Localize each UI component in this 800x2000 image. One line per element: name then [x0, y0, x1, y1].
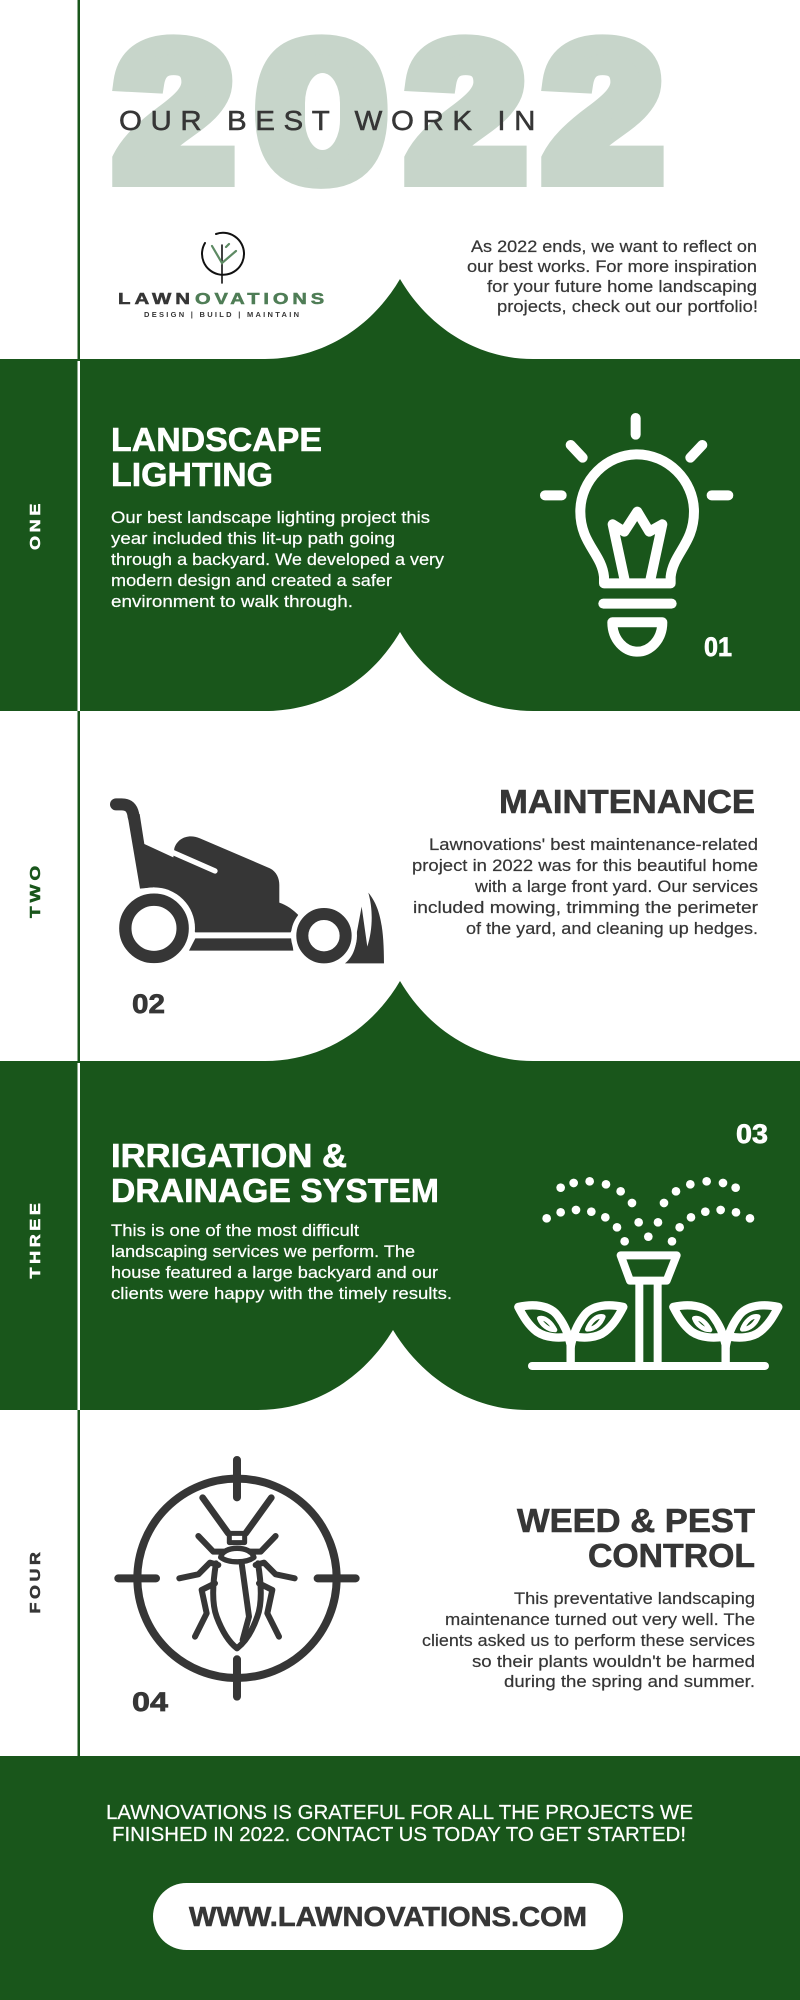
icon: light bulb	[545, 418, 728, 652]
body text: with a large front yard. Our services	[474, 878, 758, 896]
heading	[517, 1502, 755, 1574]
body text: year included this lit-up path going	[111, 530, 395, 548]
body text: Our best landscape lighting project this	[111, 509, 430, 527]
logo: Lawnovations	[118, 233, 328, 319]
vertical timeline line	[78, 0, 80, 359]
call to action text: FINISHED IN 2022. CONTACT US TODAY TO GET STARTED!	[112, 1824, 686, 1846]
body text	[111, 1222, 452, 1303]
body text: modern design and created a safer	[111, 572, 393, 590]
heading: LIGHTING	[111, 456, 273, 493]
intro text: projects, check out our portfolio!	[497, 298, 758, 316]
number 04: 04	[132, 1687, 168, 1717]
vertical timeline line	[78, 361, 80, 711]
body text	[111, 509, 445, 611]
big year 2022: 0	[258, 6, 385, 218]
band background with peak	[0, 1330, 800, 1756]
panel: weed and pest control	[0, 1330, 800, 1756]
number 01: 01	[704, 632, 732, 662]
body text	[422, 1590, 755, 1691]
number 02: 02	[132, 989, 165, 1019]
side label ONE: ONE	[27, 500, 44, 550]
body text: project in 2022 was for this beautiful home	[412, 857, 758, 875]
band background with peak	[0, 981, 800, 1410]
heading: MAINTENANCE	[499, 783, 755, 820]
icon: insect in target	[118, 1460, 356, 1697]
big year 2022: 2	[116, 6, 232, 218]
website pill	[153, 1883, 623, 1950]
intro text: our best works. For more inspiration	[467, 258, 757, 276]
body text: maintenance turned out very well. The	[445, 1611, 755, 1629]
body text: during the spring and summer.	[504, 1673, 755, 1691]
body text	[412, 836, 759, 938]
intro text: As 2022 ends, we want to reflect on	[471, 238, 757, 256]
footer background	[0, 1756, 800, 2000]
body text: This preventative landscaping	[514, 1590, 755, 1608]
panel: irrigation and drainage	[0, 981, 800, 1410]
logo tagline: DESIGN | BUILD | MAINTAIN	[144, 310, 299, 319]
panel: maintenance	[0, 632, 800, 1061]
number 03: 03	[736, 1119, 768, 1149]
big year 2022: 2	[545, 6, 661, 218]
side label FOUR: FOUR	[27, 1548, 44, 1614]
big year 2022	[116, 6, 661, 218]
body text: of the yard, and cleaning up hedges.	[466, 920, 758, 938]
intro text	[467, 238, 758, 316]
call to action text	[106, 1802, 693, 1846]
heading	[111, 1137, 439, 1209]
band background with peak	[0, 279, 800, 711]
body text: landscaping services we perform. The	[111, 1243, 415, 1261]
vertical timeline line	[78, 1410, 80, 1756]
vertical timeline line	[78, 1063, 80, 1410]
intro text: for your future home landscaping	[487, 278, 757, 296]
body text: included mowing, trimming the perimeter	[413, 899, 759, 917]
body text: house featured a large backyard and our	[111, 1264, 439, 1282]
heading: IRRIGATION &	[111, 1137, 347, 1174]
body text: so their plants wouldn't be harmed	[472, 1653, 755, 1671]
panel: footer	[0, 1756, 800, 2000]
vertical timeline line	[78, 711, 80, 1061]
band background with peak	[0, 632, 800, 1061]
logo wordmark: OVATIONS	[195, 291, 328, 308]
body text: through a backyard. We developed a very	[111, 551, 445, 569]
heading	[111, 421, 322, 493]
big year 2022: 2	[408, 6, 524, 218]
call to action text: LAWNOVATIONS IS GRATEFUL FOR ALL THE PROJECTS WE	[106, 1802, 693, 1824]
body text: This is one of the most difficult	[111, 1222, 359, 1240]
side label THREE: THREE	[27, 1200, 44, 1278]
side label TWO: TWO	[27, 862, 44, 918]
logo wordmark	[118, 291, 328, 308]
panel: landscape lighting	[0, 279, 800, 711]
heading: DRAINAGE SYSTEM	[111, 1172, 439, 1209]
body text: environment to walk through.	[111, 593, 353, 611]
body text: Lawnovations' best maintenance-related	[429, 836, 758, 854]
heading: WEED & PEST	[517, 1502, 755, 1539]
title: OUR BEST WORK IN	[119, 105, 544, 136]
icon: tree in circle	[202, 233, 244, 283]
logo wordmark: LAWN	[118, 291, 194, 308]
heading: CONTROL	[588, 1537, 755, 1574]
body text: clients were happy with the timely results.	[111, 1285, 452, 1303]
heading: LANDSCAPE	[111, 421, 322, 458]
icon: sprinkler and plants	[518, 1177, 778, 1366]
icon: lawn mower	[113, 804, 384, 969]
website pill: WWW.LAWNOVATIONS.COM	[189, 1901, 587, 1932]
body text: clients asked us to perform these services	[422, 1632, 755, 1650]
panel: header	[78, 0, 758, 359]
